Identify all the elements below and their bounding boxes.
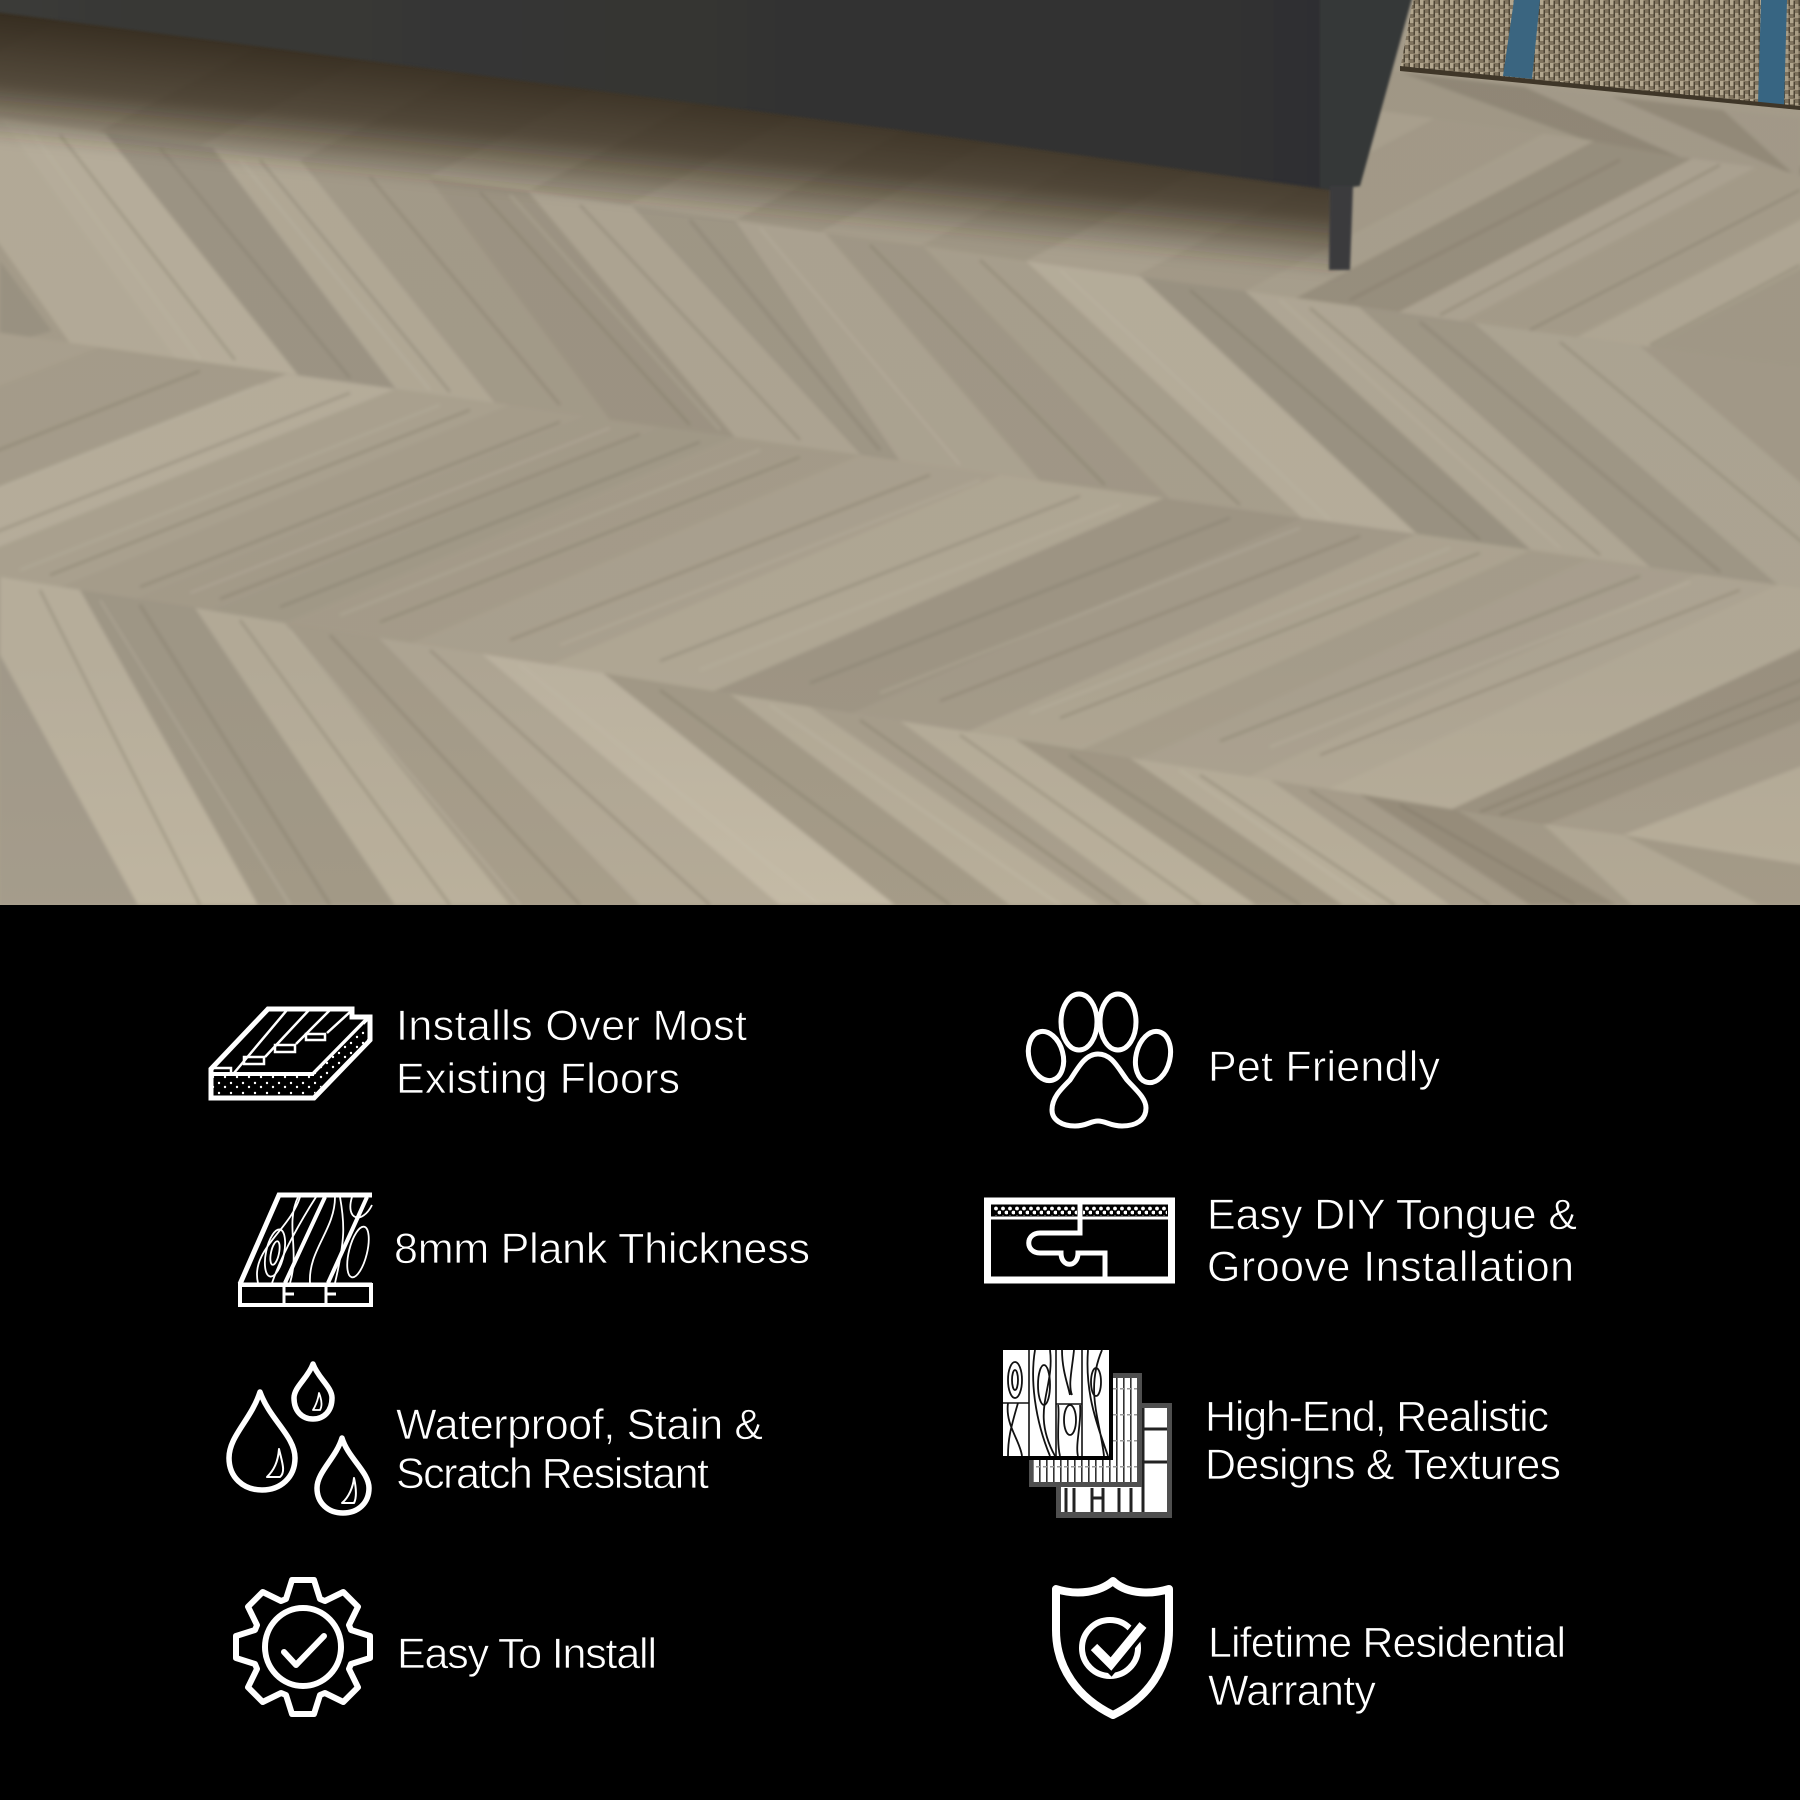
feature: easy to install [236,1580,657,1714]
text: easy DIY tongue and groove installation [1207,1191,1577,1291]
text: lifetime residential warranty [1208,1619,1566,1715]
icon: water drops [229,1364,369,1513]
text: easy DIY tongue and groove installation: Groove Installation [1207,1243,1574,1291]
text: installs over most existing floors [396,1002,747,1103]
text: high-end, realistic designs and textures: High-End, Realistic [1205,1393,1549,1441]
couch [0,0,1413,270]
text: installs over most existing floors: Installs Over Most [396,1002,747,1050]
feature: lifetime residential warranty [1056,1581,1566,1715]
icon: shield with check [1056,1581,1169,1715]
text: easy to install: Easy To Install [397,1630,657,1678]
text: lifetime residential warranty: Warranty [1208,1667,1376,1715]
text: installs over most existing floors: Existing Floors [396,1055,680,1103]
feature: 8mm plank thickness [238,1195,810,1305]
plank row pointing down-right [0,120,1800,586]
text: easy DIY tongue and groove installation: Easy DIY Tongue & [1207,1191,1577,1239]
feature: high-end, realistic designs and textures [1003,1350,1561,1518]
couch leg [1329,186,1353,270]
icon: layered floor block [211,1009,370,1099]
feature: pet friendly [1023,994,1440,1126]
shadow under couch [0,11,1333,272]
front swatch: wood grain [1003,1350,1113,1460]
plank row pointing down-left [0,324,1800,900]
text: lifetime residential warranty: Lifetime Residential [1208,1619,1566,1667]
text: high-end, realistic designs and textures: Designs & Textures [1205,1441,1561,1489]
text: waterproof, stain and scratch resistant: Scratch Resistant [396,1450,709,1498]
grey tone over floor [0,113,1800,766]
feature: waterproof, stain and scratch resistant [229,1364,763,1513]
panel: black feature section [0,905,1800,1800]
panel: floor photo [0,0,1800,905]
icon: tongue and groove cross-section [988,1199,1172,1282]
planks beside the rug [1406,73,1800,172]
text: pet friendly: Pet Friendly [1208,1043,1440,1091]
text: high-end, realistic designs and textures [1205,1393,1561,1489]
rug [1400,0,1800,110]
feature: installs over most existing floors [211,1002,747,1103]
icon: wood plank with grain [238,1195,373,1305]
icon: stacked texture swatches [1003,1350,1172,1518]
feature: easy DIY tongue and groove installation [988,1191,1577,1291]
plank row above the first seam [1302,142,1800,346]
icon: paw print [1023,994,1175,1126]
text: 8mm plank thickness: 8mm Plank Thickness [394,1225,810,1273]
icon: gear with check [236,1580,370,1714]
lower plank row pointing down-right [0,577,1800,905]
middle swatch: stripes [1029,1373,1142,1487]
wood grain streaks [0,135,1800,905]
chevron wood planks [0,0,1800,905]
text: waterproof, stain and scratch resistant [396,1401,763,1498]
back swatch: bricks [1056,1403,1172,1518]
text: waterproof, stain and scratch resistant: Waterproof, Stain & [396,1401,763,1449]
